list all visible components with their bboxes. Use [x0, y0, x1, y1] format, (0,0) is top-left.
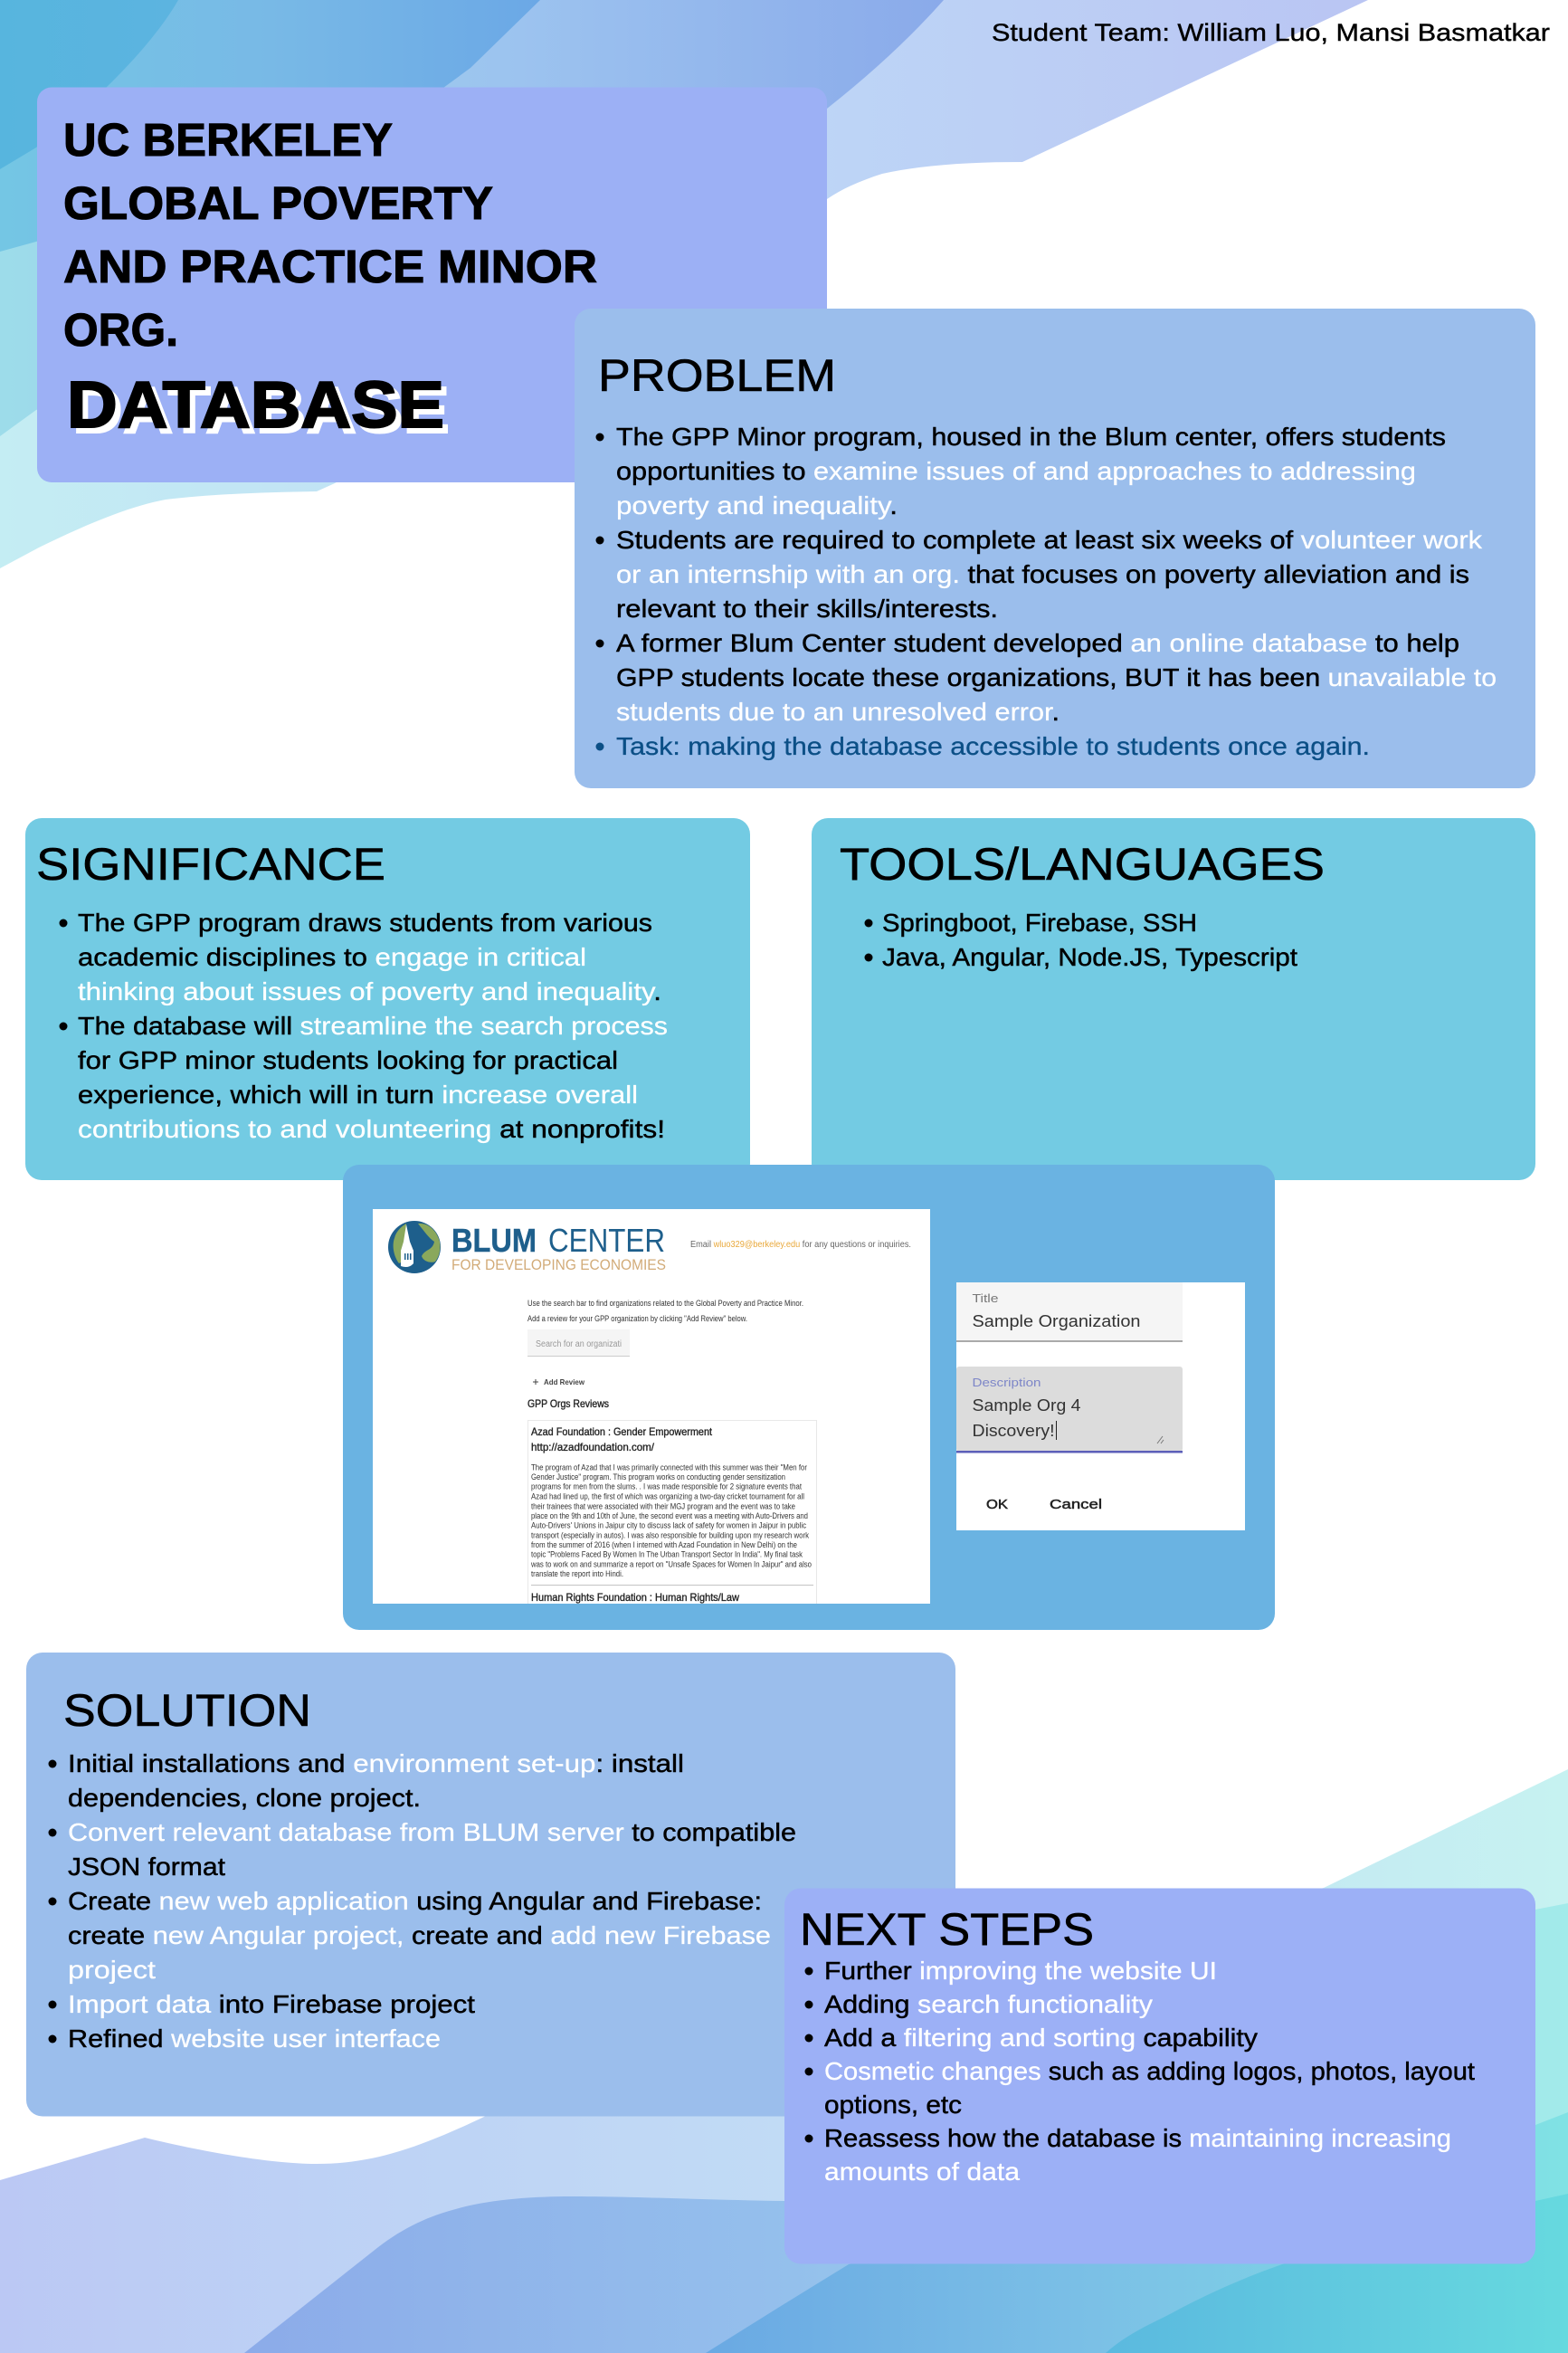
- title heading: AND PRACTICE MINOR: [63, 241, 597, 292]
- significance bullet list: experience, which will in turn increase overall: [78, 1081, 638, 1109]
- page instructions: Use the search bar to find organizations related to the Global Poverty and Practice Minor.: [527, 1299, 803, 1309]
- significance bullet list: [60, 909, 668, 1143]
- solution bullet list: [49, 1749, 796, 2053]
- next steps bullet list: amounts of data: [824, 2158, 1021, 2186]
- significance bullet list: thinking about issues of poverty and inequality .: [78, 977, 661, 1005]
- page instructions: [527, 1299, 803, 1324]
- tools bullet list: Springboot, Firebase, SSH: [882, 909, 1197, 937]
- next steps bullet list: Further improving the website UI: [824, 1957, 1217, 1985]
- database heading with white shadow: DATABASE: [67, 369, 444, 442]
- panel: tools and languages: [812, 818, 1535, 1180]
- panel: problem: [575, 309, 1535, 788]
- problem bullet list: Task: making the database accessible to students once again.: [616, 732, 1370, 760]
- significance bullet list: for GPP minor students looking for practical: [78, 1046, 618, 1074]
- review card: Azad had lined up, the first of which was organizing a two-day cricket tournament for all: [531, 1492, 804, 1501]
- next steps bullet list: Cosmetic changes such as adding logos, photos, layout: [824, 2057, 1475, 2085]
- significance heading: SIGNIFICANCE: [36, 839, 385, 890]
- solution bullet list: Import data into Firebase project: [68, 1990, 475, 2018]
- panel: next steps: [784, 1888, 1535, 2264]
- description field: Discovery!: [972, 1422, 1055, 1440]
- review card: http://azadfoundation.com/: [531, 1441, 655, 1453]
- title heading: GLOBAL POVERTY: [63, 177, 493, 229]
- description field: [956, 1367, 1183, 1453]
- review card: from the summer of 2016 (when I interned with Azad Foundation in New Delhi) on the: [531, 1540, 797, 1549]
- review card: programs for men from the slums. . I was made responsible for 2 signature events that: [531, 1482, 802, 1491]
- next steps bullet list: Adding search functionality: [824, 1990, 1153, 2018]
- tools heading: TOOLS/LANGUAGES: [840, 839, 1325, 890]
- title field: Title: [972, 1291, 999, 1305]
- icon: blum center globe logo: [388, 1221, 441, 1273]
- title field: Sample Organization: [972, 1312, 1140, 1330]
- review card: The program of Azad that I was primarily connected with this summer was their "Men for: [531, 1462, 807, 1472]
- problem bullet list: [595, 423, 1497, 760]
- search box: Search for an organizati: [536, 1339, 622, 1349]
- solution bullet list: create new Angular project, create and add new Firebase: [68, 1921, 771, 1949]
- review card: Gender Justice" program. This program works on conducting gender sensitization: [531, 1472, 785, 1481]
- solution bullet list: Initial installations and environment set-up : install: [68, 1749, 684, 1777]
- problem bullet list: GPP students locate these organizations, BUT it has been unavailable to: [616, 663, 1497, 691]
- next steps bullet list: options, etc: [824, 2091, 962, 2119]
- solution bullet list: project: [68, 1956, 156, 1984]
- search box: [527, 1329, 630, 1357]
- blum center wordmark: BLUM: [451, 1222, 537, 1259]
- panel: solution: [26, 1653, 955, 2116]
- problem bullet list: A former Blum Center student developed an online database to help: [616, 629, 1459, 657]
- review card: transport (especially in autos). I was also responsible for building upon my research work: [531, 1530, 809, 1539]
- panel: website screenshots: [343, 1165, 1275, 1630]
- problem bullet list: relevant to their skills/interests.: [616, 595, 998, 623]
- next steps bullet list: [805, 1957, 1475, 2186]
- description field: Description: [972, 1376, 1041, 1389]
- screenshot: database home page: [373, 1209, 930, 1604]
- problem bullet list: or an internship with an org. that focuses on poverty alleviation and is: [616, 560, 1469, 588]
- significance bullet list: contributions to and volunteering at nonprofits!: [78, 1115, 665, 1143]
- add review button: Add Review: [544, 1377, 584, 1386]
- problem bullet list: poverty and inequality .: [616, 491, 898, 519]
- next steps bullet list: Reassess how the database is maintaining increasing: [824, 2124, 1451, 2152]
- problem bullet list: students due to an unresolved error .: [616, 698, 1060, 726]
- description field: Sample Org 4: [972, 1396, 1080, 1415]
- significance bullet list: The database will streamline the search process: [78, 1012, 668, 1040]
- tools bullet list: Java, Angular, Node.JS, Typescript: [882, 943, 1297, 971]
- solution bullet list: dependencies, clone project.: [68, 1784, 421, 1812]
- page instructions: Add a review for your GPP organization by clicking "Add Review" below.: [527, 1314, 747, 1324]
- next steps bullet list: Add a filtering and sorting capability: [824, 2024, 1258, 2052]
- review card: was to work on and summarize a report on "Unsafe Spaces for Women In Jaipur" and also: [530, 1559, 812, 1568]
- problem bullet list: The GPP Minor program, housed in the Blum center, offers students: [616, 423, 1446, 451]
- problem heading: PROBLEM: [598, 350, 836, 401]
- background waves: bottom: [0, 1769, 1568, 2353]
- solution heading: SOLUTION: [63, 1685, 311, 1736]
- solution bullet list: Refined website user interface: [68, 2024, 441, 2053]
- problem bullet list: Students are required to complete at least six weeks of volunteer work: [616, 526, 1482, 554]
- next steps heading: NEXT STEPS: [800, 1904, 1094, 1955]
- student team credit: Student Team: William Luo, Mansi Basmatkar: [992, 19, 1550, 46]
- reviews heading: GPP Orgs Reviews: [527, 1397, 609, 1410]
- review card: topic "Problems Faced By Women In The Urban Transport Sector In India". My final task: [531, 1550, 803, 1559]
- significance bullet list: The GPP program draws students from various: [78, 909, 652, 937]
- dialog buttons: Cancel: [1050, 1497, 1102, 1512]
- title heading: ORG.: [63, 304, 178, 356]
- review card: their trainees that were associated with their MGJ program and the event was to take: [531, 1501, 795, 1510]
- review card: Auto-Drivers' Unions in Jaipur city to discuss lack of safety for women in Jaipur in public: [531, 1521, 806, 1530]
- title heading: [63, 114, 597, 356]
- title field: [956, 1282, 1183, 1342]
- problem bullet list: opportunities to examine issues of and approaches to addressing: [616, 457, 1416, 485]
- contact email line: Email wluo329@berkeley.edu for any questions or inquiries.: [690, 1239, 911, 1250]
- review card: Azad Foundation : Gender Empowerment: [531, 1425, 713, 1438]
- solution bullet list: JSON format: [68, 1853, 225, 1881]
- tools bullet list: [865, 909, 1297, 971]
- blum center wordmark: FOR DEVELOPING ECONOMIES: [451, 1256, 666, 1273]
- solution bullet list: Convert relevant database from BLUM server to compatible: [68, 1818, 796, 1846]
- blum center wordmark: [451, 1222, 666, 1273]
- panel: title: [37, 87, 827, 482]
- screenshot: add review dialog: [956, 1282, 1245, 1530]
- blum center wordmark: CENTER: [548, 1222, 665, 1259]
- panel: significance: [25, 818, 750, 1180]
- review card: [528, 1421, 816, 1604]
- review card: place on the 9th and 10th of June, the second event was a meeting with Auto-Drivers and: [531, 1511, 808, 1520]
- significance bullet list: academic disciplines to engage in critical: [78, 943, 586, 971]
- dialog buttons: [986, 1497, 1102, 1512]
- review card: translate the report into Hindi.: [531, 1569, 623, 1578]
- title heading: UC BERKELEY: [63, 114, 393, 166]
- solution bullet list: Create new web application using Angular and Firebase:: [68, 1887, 762, 1915]
- dialog buttons: OK: [986, 1497, 1008, 1512]
- background waves: top left: [0, 0, 1368, 568]
- review card: Human Rights Foundation : Human Rights/Law: [531, 1591, 739, 1604]
